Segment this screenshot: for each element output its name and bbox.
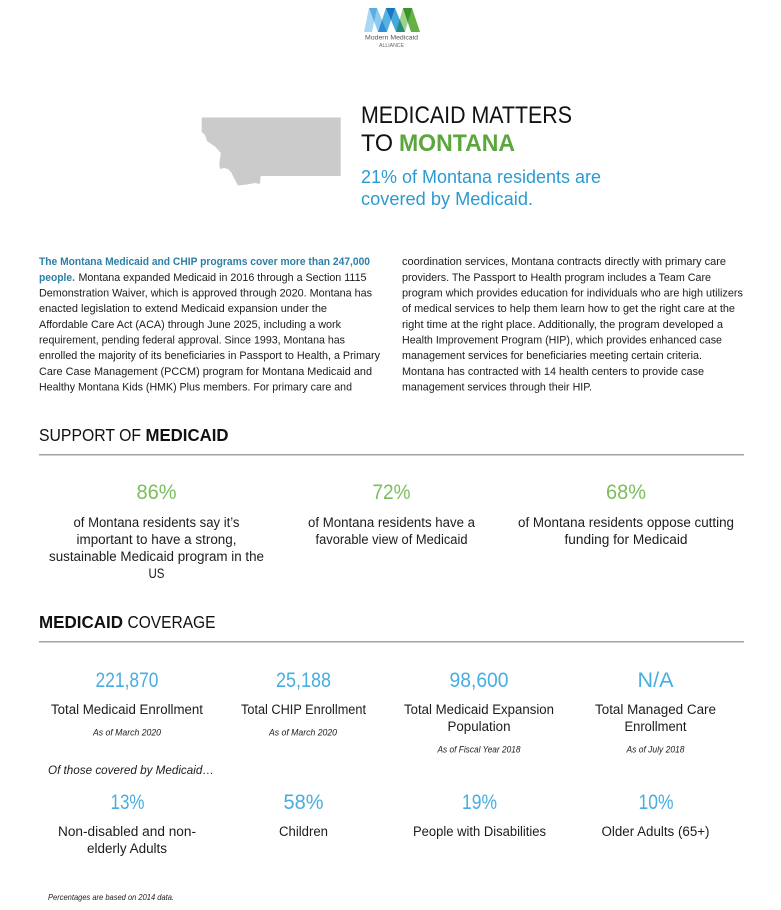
text block: program description right column: program which provides education for individuals who are high utilizers — [402, 288, 743, 300]
text: of those covered by Medicaid: Of those covered by Medicaid… — [48, 763, 214, 777]
stat: 86% say program is important — [49, 481, 264, 581]
subtitle: coverage statistic: 21% of Montana residents are — [361, 166, 601, 187]
heading: support of Medicaid: SUPPORT OF — [39, 425, 141, 445]
heading: Medicaid coverage — [39, 612, 216, 632]
text block: program description right column: right time at the right place. Additionally, the program developed a — [402, 319, 724, 331]
stat: 72% favorable view: favorable view of Medicaid — [316, 532, 468, 547]
title: MONTANA — [399, 130, 515, 157]
stat: people with disabilities — [413, 791, 546, 839]
text block: program description left column — [39, 256, 380, 394]
stat: Medicaid expansion population: 98,600 — [450, 669, 508, 692]
stat: managed care enrollment: As of July 2018 — [626, 744, 684, 754]
text block: program description left column: Demonstration Waiver, which is approved through 2020. Montana has — [39, 288, 372, 300]
footnote: Percentages are based on 2014 data. — [48, 892, 174, 902]
text block: program description right column: management services for beneficiaries meeting certain criteria. — [402, 350, 702, 362]
text block: program description left column: people. — [39, 272, 75, 284]
text block: program description right column: Health Improvement Program (HIP), which provides enhanced case — [402, 334, 722, 346]
stat: children: 58% — [284, 791, 324, 814]
stat: Medicaid expansion population: As of Fiscal Year 2018 — [437, 744, 520, 754]
text block: program description left column: enacted legislation to extend Medicaid expansion under the — [39, 303, 327, 315]
stat: 72% favorable view: of Montana residents have a — [308, 515, 475, 530]
stat: non-disabled adults — [58, 791, 196, 856]
stat: total Medicaid enrollment: As of March 2020 — [92, 728, 161, 738]
text block: program description left column: requirement, pending federal approval. Since 1993, Montana has — [39, 334, 345, 346]
stat: 86% say program is important: 86% — [136, 481, 176, 504]
text block: program description left column: Care Case Management (PCCM) program for Montana Medicaid and — [39, 366, 372, 378]
stat: 68% oppose cutting funding — [518, 481, 734, 547]
stat: 68% oppose cutting funding: 68% — [606, 481, 646, 504]
text block: program description left column: enrolled the majority of its beneficiaries in Passport to Health, a Primary — [39, 350, 380, 362]
logo: Modern Medicaid Alliance — [364, 8, 420, 49]
title: MEDICAID MATTERS — [361, 102, 572, 129]
map: Montana state silhouette — [202, 118, 341, 186]
stat: 86% say program is important: US — [148, 566, 164, 581]
text block: program description left column: The Montana Medicaid and CHIP programs cover more than 247,000 — [39, 256, 370, 268]
logo: Modern Medicaid Alliance: Modern Medicaid — [365, 34, 419, 42]
heading: Medicaid coverage: MEDICAID — [39, 612, 123, 632]
text block: program description right column: providers. The Passport to Health program includes a Team Care — [402, 272, 711, 284]
subtitle: coverage statistic — [361, 166, 601, 209]
stat: children: Children — [279, 824, 328, 839]
stat: Medicaid expansion population: Total Medicaid Expansion — [404, 702, 554, 717]
stat: non-disabled adults: 13% — [110, 791, 144, 814]
stat: people with disabilities: 19% — [462, 791, 497, 814]
stat: total CHIP enrollment: Total CHIP Enrollment — [241, 702, 366, 717]
stat: total Medicaid enrollment — [51, 669, 203, 738]
stat: Medicaid expansion population — [404, 669, 554, 754]
stat: total Medicaid enrollment: Total Medicaid Enrollment — [51, 702, 203, 717]
stat: children — [279, 791, 328, 839]
stat: 68% oppose cutting funding: of Montana residents oppose cutting — [518, 515, 734, 530]
stat: 72% favorable view: 72% — [372, 481, 410, 504]
stat: 72% favorable view — [308, 481, 475, 547]
stat: Medicaid expansion population: Population — [448, 719, 510, 734]
stat: 86% say program is important: sustainable Medicaid program in the — [49, 549, 264, 564]
text block: program description right column: coordination services, Montana contracts directly with primary care — [402, 256, 726, 268]
stat: total CHIP enrollment — [241, 669, 366, 738]
stat: 68% oppose cutting funding: funding for Medicaid — [564, 532, 688, 547]
stat: older adults — [602, 791, 710, 839]
heading: support of Medicaid: MEDICAID — [146, 425, 228, 445]
stat: total Medicaid enrollment: 221,870 — [96, 669, 158, 692]
stat: managed care enrollment: Total Managed Care — [595, 702, 716, 717]
heading: Medicaid coverage: COVERAGE — [128, 612, 216, 632]
text block: program description right column: management services through their HIP. — [402, 382, 592, 394]
title — [361, 102, 572, 157]
subtitle: coverage statistic: covered by Medicaid. — [361, 188, 533, 209]
stat: 86% say program is important: important to have a strong, — [76, 532, 236, 547]
text block: program description right column: of medical services to help them learn how to get the right care at the — [402, 303, 735, 315]
text block: program description right column — [402, 256, 743, 394]
stat: managed care enrollment — [595, 669, 716, 754]
stat: total CHIP enrollment: 25,188 — [276, 669, 331, 692]
text block: program description left column: Affordable Care Act (ACA) through June 2025, including a work — [39, 319, 341, 331]
stat: managed care enrollment: N/A — [638, 669, 674, 692]
title: TO — [361, 130, 393, 157]
stat: non-disabled adults: elderly Adults — [87, 841, 167, 856]
heading: support of Medicaid — [39, 425, 228, 445]
text block: program description left column: Healthy Montana Kids (HMK) Plus members. For primary care and — [39, 382, 352, 394]
stat: 86% say program is important: of Montana residents say it’s — [74, 515, 240, 530]
text block: program description left column: Montana expanded Medicaid in 2016 through a Section 1115 — [78, 272, 366, 284]
stat: non-disabled adults: Non-disabled and non- — [58, 824, 196, 839]
stat: total CHIP enrollment: As of March 2020 — [268, 728, 337, 738]
stat: older adults: 10% — [638, 791, 674, 814]
stat: people with disabilities: People with Disabilities — [413, 824, 546, 839]
stat: managed care enrollment: Enrollment — [624, 719, 687, 734]
logo: Modern Medicaid Alliance: ALLIANCE — [379, 43, 405, 49]
stat: older adults: Older Adults (65+) — [602, 824, 710, 839]
text block: program description right column: Montana has contracted with 14 health centers to provide case — [402, 366, 704, 378]
